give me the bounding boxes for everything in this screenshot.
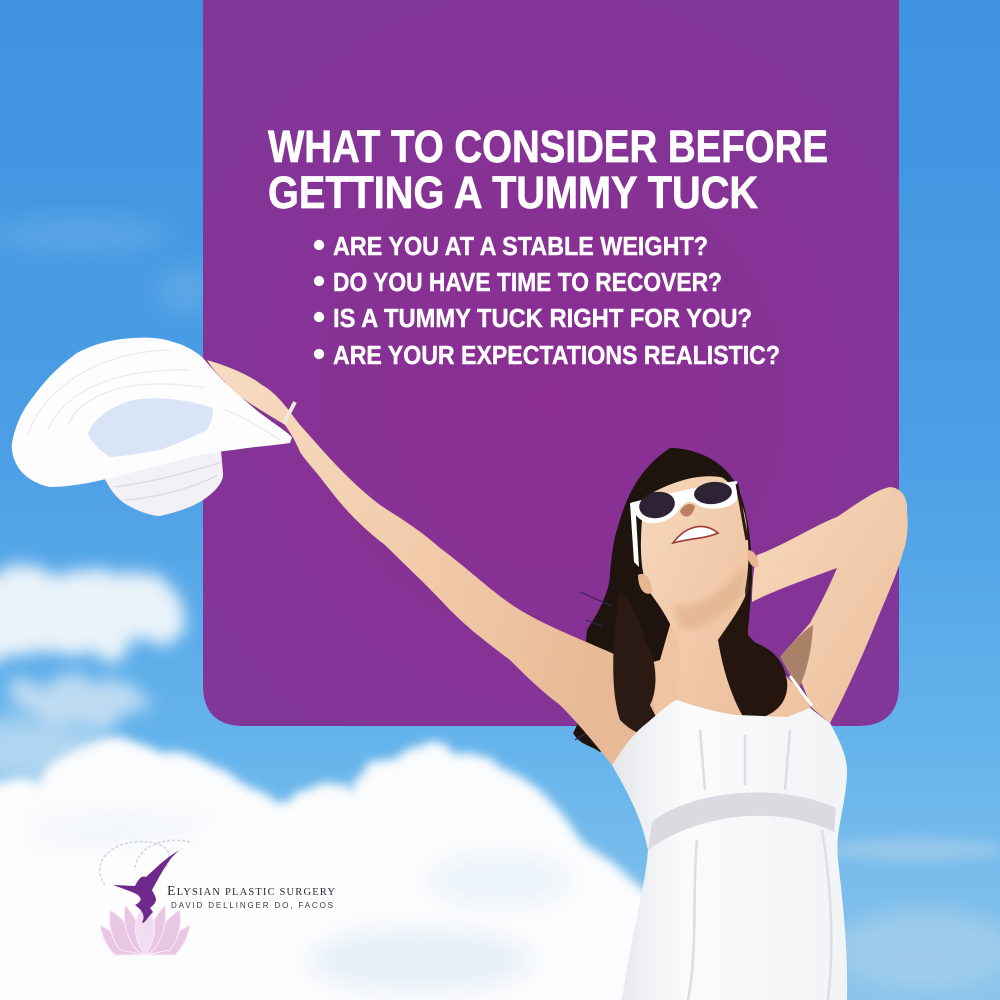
dress strap — [790, 676, 812, 706]
face and neck — [641, 470, 748, 725]
title: GETTING A TUMMY TUCK — [268, 167, 758, 218]
ear left — [638, 574, 652, 594]
item: stable weight: ARE YOU AT A STABLE WEIGHT? — [333, 233, 708, 261]
hat crown — [103, 440, 223, 516]
stray hair — [575, 592, 612, 740]
nose shadow — [680, 504, 695, 517]
dress lace band — [648, 792, 836, 850]
hair back — [573, 448, 787, 752]
woman holding hat — [207, 360, 908, 1000]
logo name: ELYSIAN PLASTIC SURGERY — [167, 884, 335, 899]
logo lotus — [100, 905, 190, 955]
ear right — [748, 550, 759, 567]
hat brim ridges — [28, 350, 280, 440]
bracelet — [284, 402, 295, 423]
underarm shadow — [780, 625, 813, 690]
logo doctor: DAVID DELLINGER DO, FACOS — [171, 901, 333, 910]
panel: purple text background — [203, 0, 899, 726]
torso skin — [590, 590, 830, 790]
logo swirl — [100, 840, 190, 885]
hat brim — [12, 338, 292, 487]
hair front strands — [613, 590, 668, 736]
checklist — [314, 233, 780, 370]
dress folds — [688, 730, 831, 1000]
sunglasses — [630, 480, 747, 567]
item: time to recover: DO YOU HAVE TIME TO RECOVER? — [333, 269, 722, 297]
smile — [673, 526, 718, 543]
logo dancer — [113, 848, 184, 923]
outstretched arm — [207, 360, 660, 765]
title — [268, 121, 828, 218]
item: right for you: IS A TUMMY TUCK RIGHT FOR YOU? — [333, 305, 752, 333]
crown ridges — [115, 462, 222, 500]
hat — [12, 338, 292, 516]
raised arm behind head — [752, 487, 908, 723]
logo glow — [80, 840, 340, 950]
hat inner — [88, 398, 213, 457]
dress — [612, 700, 847, 1000]
item: realistic expectations: ARE YOUR EXPECTATIONS REALISTIC? — [333, 342, 780, 370]
logo — [80, 840, 340, 955]
clouds — [0, 217, 1000, 1000]
neck shadow — [672, 565, 745, 629]
title: WHAT TO CONSIDER BEFORE — [268, 121, 828, 172]
